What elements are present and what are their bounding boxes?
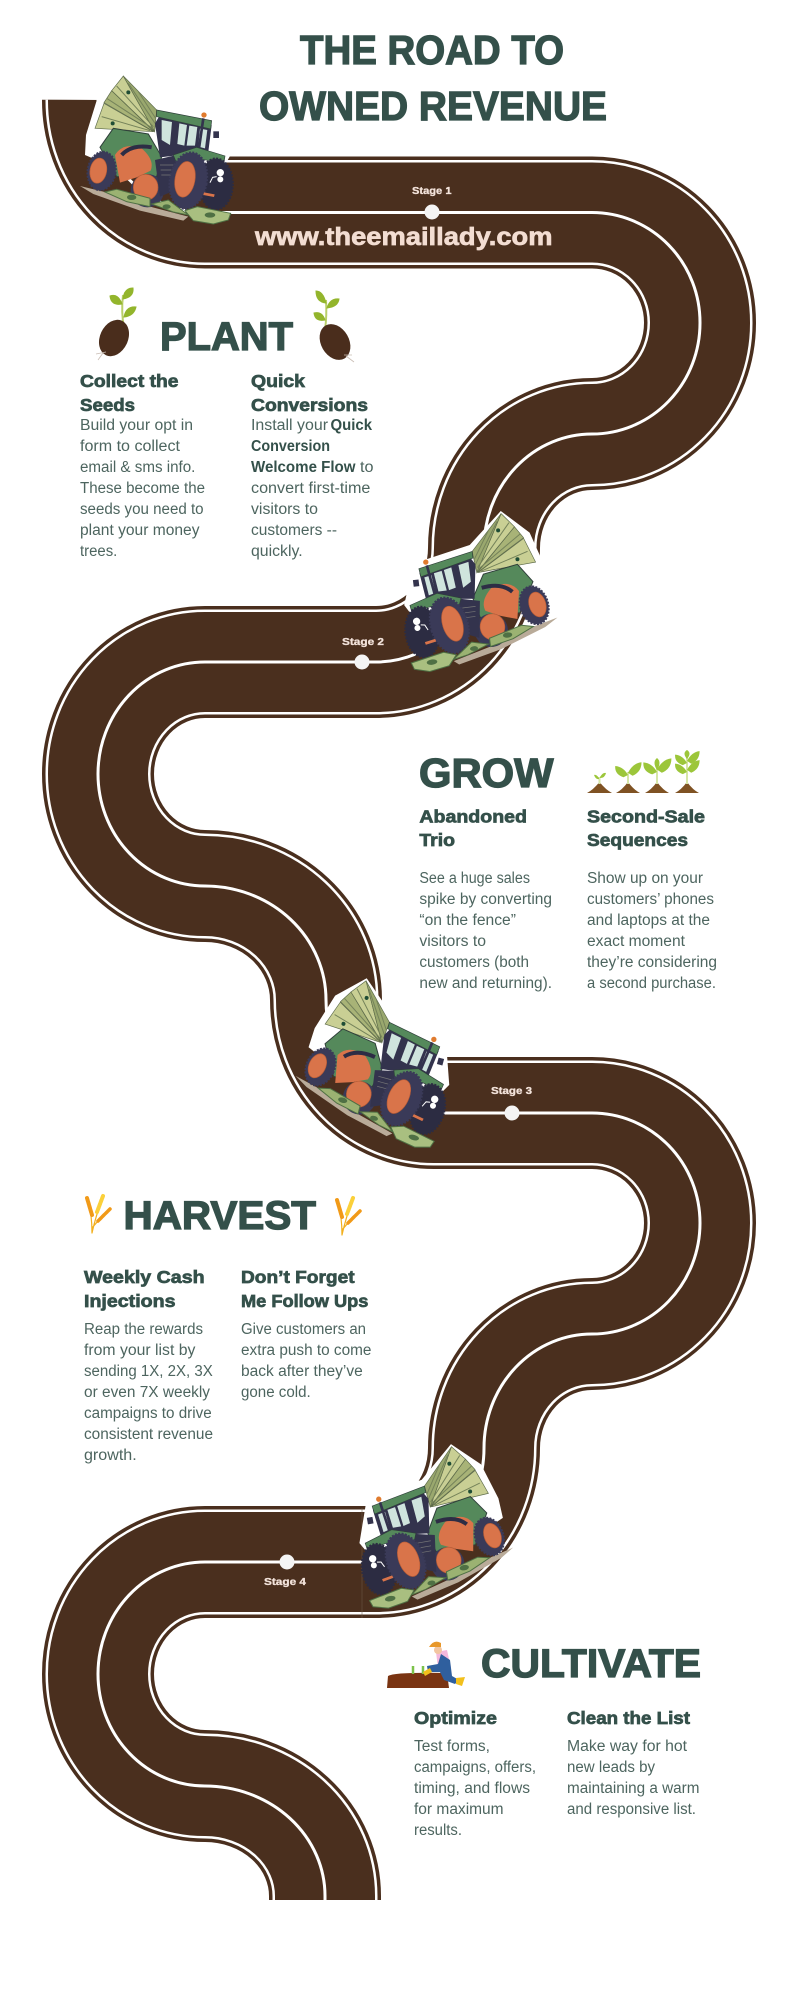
- column: clean the list: maintaining a warm: [567, 1780, 700, 1797]
- website url: www.theemaillady.com: [254, 223, 552, 251]
- column: quick conversions: visitors to: [251, 501, 318, 518]
- column: weekly cash injections: or even 7X weekly: [84, 1384, 210, 1401]
- column: second-sale sequences: and laptops at the: [587, 912, 710, 929]
- column: second-sale sequences: Show up on your: [587, 870, 703, 887]
- icon: growing sprouts: [587, 750, 700, 793]
- column: don't forget me follow ups: Me Follow Ups: [241, 1291, 369, 1311]
- title: [259, 27, 607, 129]
- column: abandoned trio: spike by converting: [419, 891, 552, 908]
- stage 3 marker: [491, 1085, 532, 1120]
- column: don't forget me follow ups: Give customers an: [241, 1321, 366, 1338]
- stage 4 marker: Stage 4: [264, 1576, 306, 1588]
- column: weekly cash injections: from your list by: [84, 1342, 196, 1359]
- column: weekly cash injections: Injections: [84, 1291, 176, 1311]
- column: abandoned trio: visitors to: [419, 933, 486, 950]
- column: optimize: timing, and flows: [414, 1780, 530, 1797]
- column: collect the seeds: [80, 371, 205, 560]
- column: second-sale sequences: they’re considering: [587, 954, 717, 971]
- heading: cultivate: CULTIVATE: [481, 1642, 701, 1686]
- column: optimize: [414, 1708, 536, 1839]
- heading: harvest: HARVEST: [124, 1194, 316, 1238]
- stage 3 marker: Stage 3: [491, 1085, 532, 1097]
- stage 1 marker: [412, 185, 452, 220]
- column: second-sale sequences: exact moment: [587, 933, 686, 950]
- column: collect the seeds: trees.: [80, 543, 117, 560]
- title: THE ROAD TO: [300, 27, 564, 73]
- column: abandoned trio: See a huge sales: [419, 870, 530, 887]
- column: clean the list: new leads by: [567, 1759, 655, 1776]
- stage 1 marker: Stage 1: [412, 185, 452, 197]
- column: second-sale sequences: Second-Sale: [587, 807, 705, 827]
- column: optimize: for maximum: [414, 1801, 504, 1818]
- stage 4 marker: [264, 1554, 306, 1588]
- tractor 2: [392, 506, 562, 674]
- column: collect the seeds: seeds you need to: [80, 501, 204, 518]
- column: quick conversions: [251, 371, 374, 560]
- column: quick conversions: Install your: [251, 417, 328, 434]
- column: collect the seeds: These become the: [80, 480, 205, 497]
- title: OWNED REVENUE: [259, 83, 607, 129]
- road: [98, 100, 700, 1900]
- column: second-sale sequences: a second purchase.: [587, 975, 716, 992]
- column: quick conversions: Quick: [330, 417, 372, 434]
- stage 2 marker: Stage 2: [342, 636, 384, 648]
- column: abandoned trio: “on the fence”: [419, 912, 516, 929]
- column: clean the list: Make way for hot: [567, 1738, 688, 1755]
- column: abandoned trio: Abandoned: [419, 807, 527, 827]
- column: quick conversions: to: [360, 459, 374, 476]
- column: abandoned trio: [419, 807, 552, 992]
- tractor 4: [343, 1437, 520, 1611]
- column: second-sale sequences: Sequences: [587, 830, 688, 850]
- column: weekly cash injections: Weekly Cash: [84, 1267, 205, 1287]
- icon: farmer planting: [387, 1642, 465, 1688]
- heading: plant: PLANT: [160, 315, 293, 359]
- column: don't forget me follow ups: back after they’ve: [241, 1363, 363, 1380]
- column: don't forget me follow ups: Don’t Forget: [241, 1267, 355, 1287]
- column: don't forget me follow ups: extra push to come: [241, 1342, 371, 1359]
- column: don't forget me follow ups: [241, 1267, 371, 1401]
- column: weekly cash injections: consistent revenue: [84, 1426, 213, 1443]
- column: abandoned trio: customers (both: [419, 954, 529, 971]
- column: collect the seeds: email & sms info.: [80, 459, 195, 476]
- column: quick conversions: Conversions: [251, 395, 368, 415]
- icon: wheat right: [337, 1198, 360, 1235]
- stage 2 marker: [342, 636, 384, 670]
- column: collect the seeds: Build your opt in: [80, 417, 193, 434]
- column: weekly cash injections: growth.: [84, 1447, 137, 1464]
- column: quick conversions: customers --: [251, 522, 337, 539]
- column: clean the list: and responsive list.: [567, 1801, 696, 1818]
- column: optimize: Optimize: [414, 1708, 497, 1728]
- column: weekly cash injections: [84, 1267, 213, 1464]
- icon: seed sprout right: [313, 291, 357, 365]
- tractor 3: [286, 967, 472, 1152]
- column: optimize: results.: [414, 1822, 462, 1839]
- column: quick conversions: Welcome Flow: [251, 459, 356, 476]
- column: optimize: Test forms,: [414, 1738, 490, 1755]
- column: weekly cash injections: Reap the rewards: [84, 1321, 203, 1338]
- column: clean the list: Clean the List: [567, 1708, 690, 1728]
- column: clean the list: [567, 1708, 700, 1818]
- column: abandoned trio: Trio: [419, 830, 455, 850]
- panel: plant: [80, 288, 374, 560]
- column: quick conversions: quickly.: [251, 543, 303, 560]
- column: quick conversions: Quick: [251, 371, 305, 391]
- column: quick conversions: convert first-time: [251, 480, 370, 497]
- column: collect the seeds: form to collect: [80, 438, 181, 455]
- panel: harvest: [84, 1194, 371, 1464]
- panel: cultivate: [387, 1642, 701, 1839]
- column: weekly cash injections: campaigns to drive: [84, 1405, 212, 1422]
- column: second-sale sequences: [587, 807, 717, 992]
- column: optimize: campaigns, offers,: [414, 1759, 536, 1776]
- column: collect the seeds: Collect the: [80, 371, 179, 391]
- column: second-sale sequences: customers’ phones: [587, 891, 714, 908]
- panel: grow: [419, 750, 717, 992]
- icon: seed sprout left: [93, 288, 136, 361]
- column: don't forget me follow ups: gone cold.: [241, 1384, 311, 1401]
- tractor 1: [80, 73, 233, 224]
- column: collect the seeds: Seeds: [80, 395, 135, 415]
- column: collect the seeds: plant your money: [80, 522, 200, 539]
- column: abandoned trio: new and returning).: [419, 975, 552, 992]
- icon: wheat left: [87, 1196, 110, 1233]
- heading: grow: GROW: [419, 750, 554, 796]
- column: weekly cash injections: sending 1X, 2X, 3X: [84, 1363, 213, 1380]
- column: quick conversions: Conversion: [251, 438, 330, 455]
